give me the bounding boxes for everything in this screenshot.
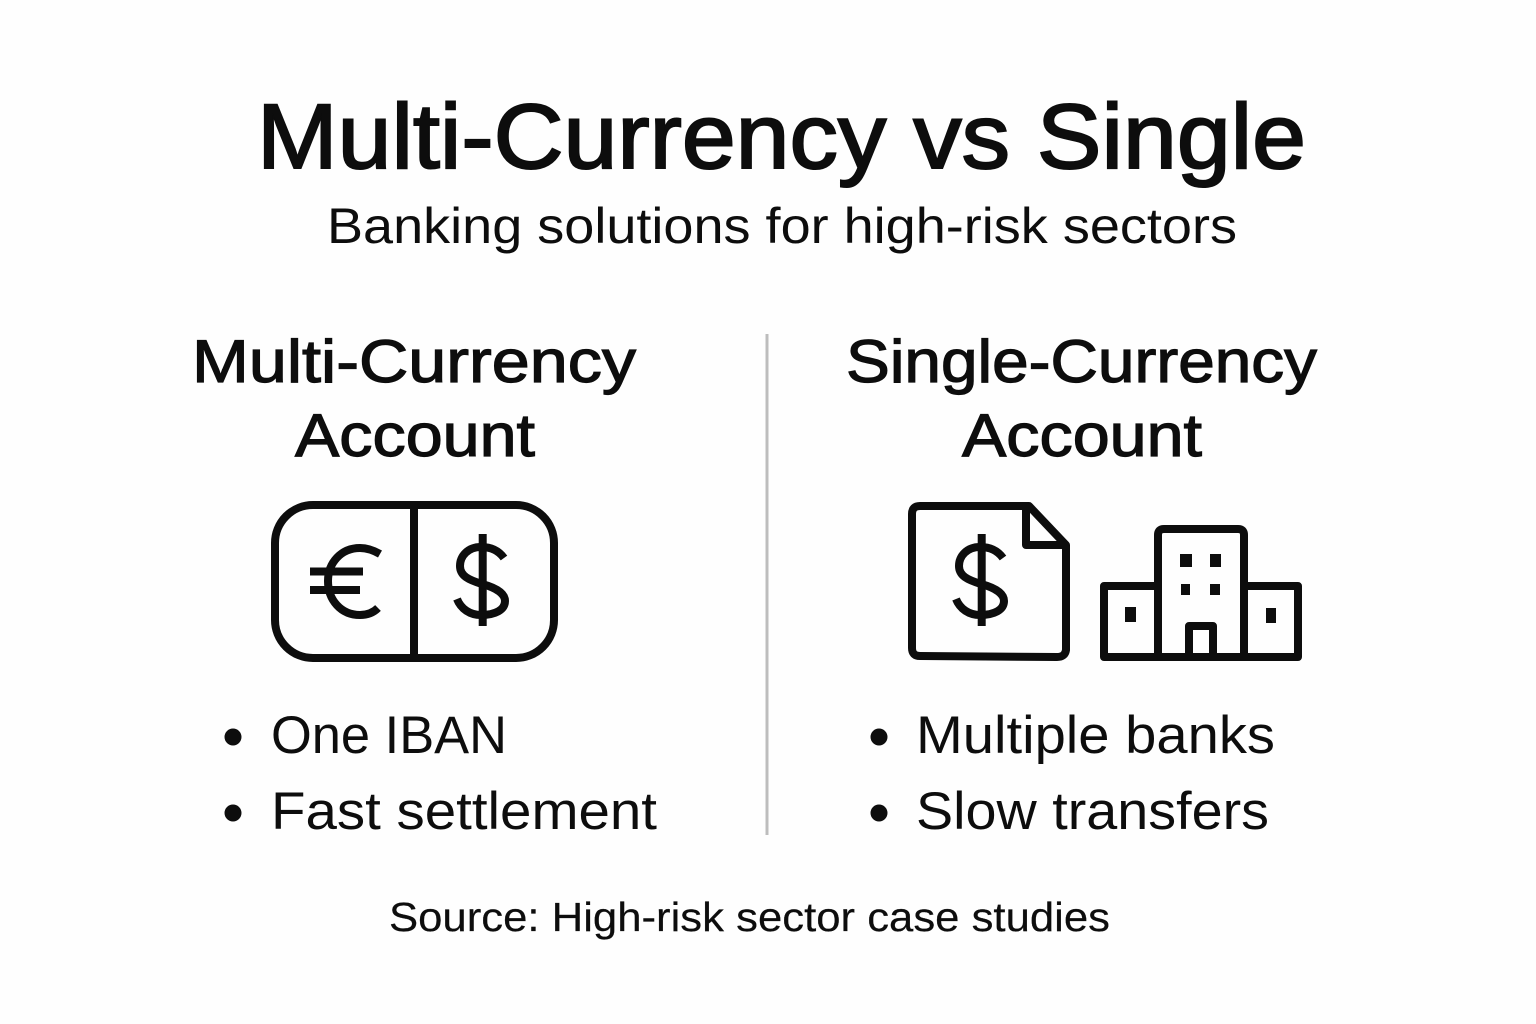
bullet list: multi-currency benefits: One IBAN [271, 706, 507, 765]
panel: single-currency account [846, 328, 1317, 841]
icon: bank buildings [1104, 529, 1298, 657]
center divider [766, 334, 768, 835]
source note: Source: High-risk sector case studies [389, 894, 1110, 940]
bullet list: single-currency drawbacks [870, 706, 1275, 841]
heading: multi-currency account: Multi-Currency [192, 328, 636, 395]
icon: euro and dollar card [275, 504, 554, 658]
subtitle: Banking solutions for high-risk sectors [327, 198, 1237, 254]
heading: single-currency account [846, 328, 1317, 469]
heading: multi-currency account [192, 328, 636, 469]
heading: multi-currency account: Account [295, 402, 535, 469]
panel: multi-currency account [192, 328, 657, 841]
heading: single-currency account: Account [962, 402, 1202, 469]
bullet list: single-currency drawbacks: Multiple banks [916, 706, 1275, 765]
heading: single-currency account: Single-Currency [846, 328, 1317, 395]
bullet list: multi-currency benefits: Fast settlement [271, 782, 657, 841]
icon: dollar document [912, 506, 1066, 657]
bullet list: multi-currency benefits [224, 706, 657, 841]
title: Multi-Currency vs Single [257, 86, 1306, 188]
bullet list: single-currency drawbacks: Slow transfers [916, 782, 1269, 841]
